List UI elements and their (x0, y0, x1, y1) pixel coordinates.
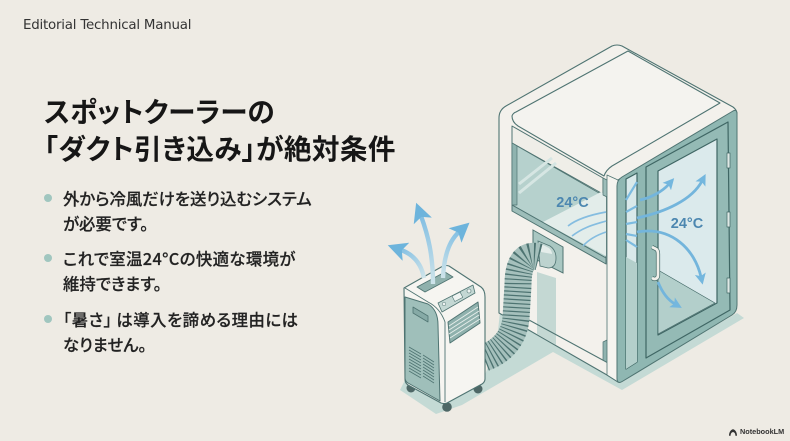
NotebookLM logo: NotebookLM (740, 427, 784, 436)
wheels (406, 384, 482, 412)
narrow window (626, 173, 637, 369)
door airflow arrows (637, 181, 702, 304)
bullet 2: 維持できます。 (63, 271, 162, 295)
floor shadows (400, 312, 744, 414)
bullet 3: 「暑さ」は導入を諦める理由には (63, 307, 299, 331)
bullet 1: が必要です。 (63, 211, 148, 235)
control panel (438, 285, 475, 312)
cabinet body (404, 266, 485, 404)
booth (499, 45, 737, 382)
bullet 1 (44, 186, 312, 235)
title: 「ダクト引き込み」が絶対条件 (44, 126, 396, 166)
bullet 1: 外から冷風だけを送り込むシステム (63, 186, 312, 210)
door glass (658, 139, 717, 335)
front vent (448, 302, 480, 343)
side handle (413, 307, 428, 322)
wall corner bracket (603, 178, 609, 198)
top vent (417, 272, 453, 292)
bullet 3: なりません。 (63, 332, 147, 356)
door handle (652, 247, 658, 279)
flexible duct hose (484, 256, 539, 358)
bullet 3 (44, 307, 299, 356)
left side panel (405, 297, 440, 401)
upper wall band (512, 126, 603, 194)
temperature label right: 24°C (671, 216, 704, 232)
portable air conditioner (404, 266, 485, 412)
bullet 2 (44, 246, 296, 295)
door face (617, 110, 737, 382)
door frame (646, 122, 730, 358)
title: スポットクーラーの (44, 90, 275, 130)
temperature label left: 24°C (556, 195, 589, 211)
wall shadow (537, 272, 556, 345)
booth left wall (499, 45, 737, 382)
body edges (405, 288, 445, 402)
door hinges (727, 153, 730, 293)
bullet 2: これで室温24°Cの快適な環境が (63, 246, 296, 270)
lower wall latch (603, 340, 610, 364)
header label: Editorial Technical Manual (23, 18, 191, 33)
roof top (512, 51, 720, 176)
left window (512, 143, 606, 264)
hot exhaust arrows (401, 216, 459, 284)
door interior floor (658, 270, 715, 334)
title (44, 90, 396, 166)
bullet list (44, 186, 312, 356)
door edge strip (607, 175, 618, 382)
duct flange (533, 230, 563, 273)
wall base line (529, 320, 610, 364)
side grille (409, 347, 434, 383)
